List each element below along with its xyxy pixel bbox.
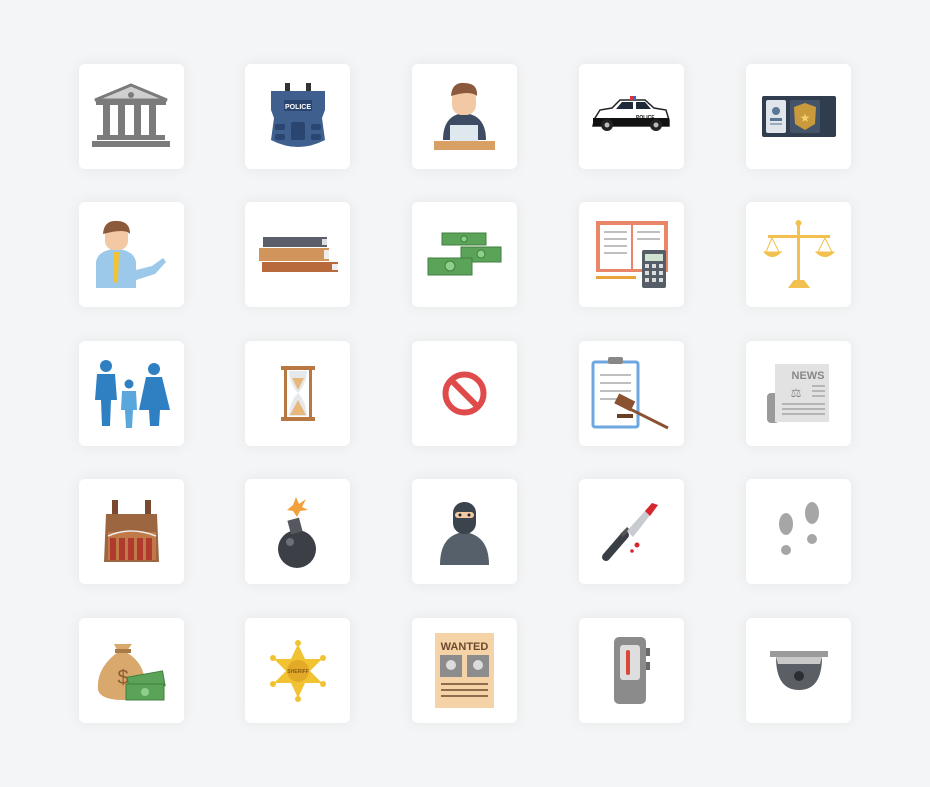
icon: family	[95, 360, 170, 428]
icon: footprints	[779, 502, 819, 555]
icon: badge wallet	[762, 96, 836, 137]
icon: newspaper: ⚖	[791, 386, 802, 400]
icon: courthouse	[92, 85, 170, 147]
icon: newspaper	[767, 364, 829, 423]
icon: police vest: POLICE	[285, 104, 311, 111]
icon: badge wallet: ★	[800, 111, 810, 125]
icon: voice recorder	[614, 637, 650, 704]
icon: book and calculator	[596, 221, 668, 288]
icon: police vest	[271, 83, 325, 147]
icon: police car: POLICE	[636, 115, 655, 121]
icon: cctv dome	[770, 651, 828, 690]
icon: man presenting	[96, 221, 166, 288]
icon: prohibition sign	[446, 374, 484, 412]
icon: wanted poster: WANTED	[441, 641, 488, 653]
icon: sheriff star: SHERIFF	[287, 669, 309, 675]
icon: clipboard and gavel	[593, 357, 668, 428]
icon: bomb vest	[104, 500, 159, 562]
icon: hourglass	[281, 366, 315, 421]
cards grid	[79, 64, 851, 723]
icon: books	[259, 237, 338, 272]
icon: money bag: $	[117, 667, 129, 689]
icon: money stacks	[428, 233, 501, 275]
icon: speaker at podium	[434, 83, 495, 150]
icon: police car	[593, 96, 669, 131]
icon: wanted poster	[435, 633, 494, 708]
icon: masked robber	[440, 502, 489, 565]
icon: bomb	[278, 497, 316, 568]
icon: sheriff star	[270, 640, 326, 702]
icon: bloody knife	[606, 503, 658, 557]
icon: money bag	[98, 644, 165, 700]
icon: newspaper: NEWS	[792, 370, 824, 382]
icon: scales	[764, 220, 834, 288]
